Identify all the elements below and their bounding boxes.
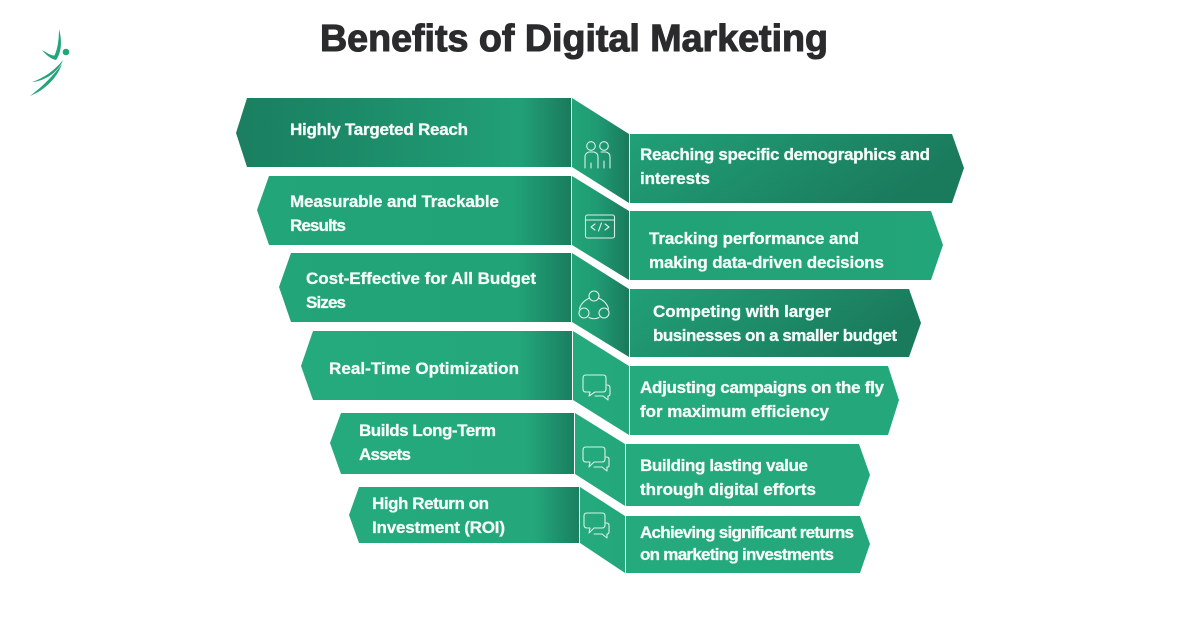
panel: row 4 Real-Time Optimization: for maximum efficiency	[640, 402, 830, 421]
panel: row 3 Cost-Effective for All Budget Sizes: businesses on a smaller budget	[653, 326, 897, 345]
panel: row 5 Builds Long-Term Assets: Building lasting value	[640, 456, 808, 475]
panel: row 3 Cost-Effective for All Budget Sizes: Cost-Effective for All Budget	[306, 269, 536, 288]
panel: row 1 Highly Targeted Reach: interests	[640, 169, 710, 188]
panel: row 5 Builds Long-Term Assets: through digital efforts	[640, 480, 816, 499]
icon: code window	[586, 215, 614, 238]
panel: row 6 High Return on Investment: on marketing investments	[640, 545, 834, 564]
panel: row 4 Real-Time Optimization: Adjusting campaigns on the fly	[640, 378, 885, 397]
panel: row 6 High Return on Investment: High Return on	[372, 494, 489, 513]
icon: network	[579, 291, 609, 319]
panel: row 1 Highly Targeted Reach: Highly Targeted Reach	[290, 120, 468, 139]
panel: row 6 High Return on Investment	[349, 487, 870, 573]
panel: row 5 Builds Long-Term Assets: Builds Long-Term	[359, 421, 496, 440]
panel: row 3 Cost-Effective for All Budget Sizes: Sizes	[306, 293, 346, 312]
panel: row 2 Measurable and Trackable Results: making data-driven decisions	[649, 253, 884, 272]
panel: row 4 Real-Time Optimization	[301, 331, 899, 435]
icon: logo	[30, 29, 69, 96]
icon: people	[585, 142, 610, 168]
panel: row 5 Builds Long-Term Assets: Assets	[359, 445, 411, 464]
icon: chat bubbles	[583, 447, 609, 471]
panel: row 1 Highly Targeted Reach: Reaching specific demographics and	[640, 145, 930, 164]
icon: chat bubbles	[583, 375, 610, 400]
panel: row 2 Measurable and Trackable Results	[257, 176, 943, 280]
title: Benefits of Digital Marketing	[320, 18, 828, 60]
panel: row 6 High Return on Investment: Investment (ROI)	[372, 518, 505, 537]
panel: row 2 Measurable and Trackable Results: Results	[290, 216, 346, 235]
panel: row 3 Cost-Effective for All Budget Sizes: Competing with larger	[653, 302, 831, 321]
panel: row 6 High Return on Investment: Achieving significant returns	[640, 523, 854, 542]
panel: row 4 Real-Time Optimization: Real-Time Optimization	[329, 359, 519, 378]
panel: row 2 Measurable and Trackable Results: Tracking performance and	[649, 229, 859, 248]
panel: row 5 Builds Long-Term Assets	[330, 413, 870, 506]
panel: row 1 Highly Targeted Reach	[236, 98, 964, 203]
panel: row 2 Measurable and Trackable Results: Measurable and Trackable	[290, 192, 499, 211]
icon: chat bubbles	[584, 513, 609, 538]
panel: row 3 Cost-Effective for All Budget Sizes	[279, 253, 921, 357]
